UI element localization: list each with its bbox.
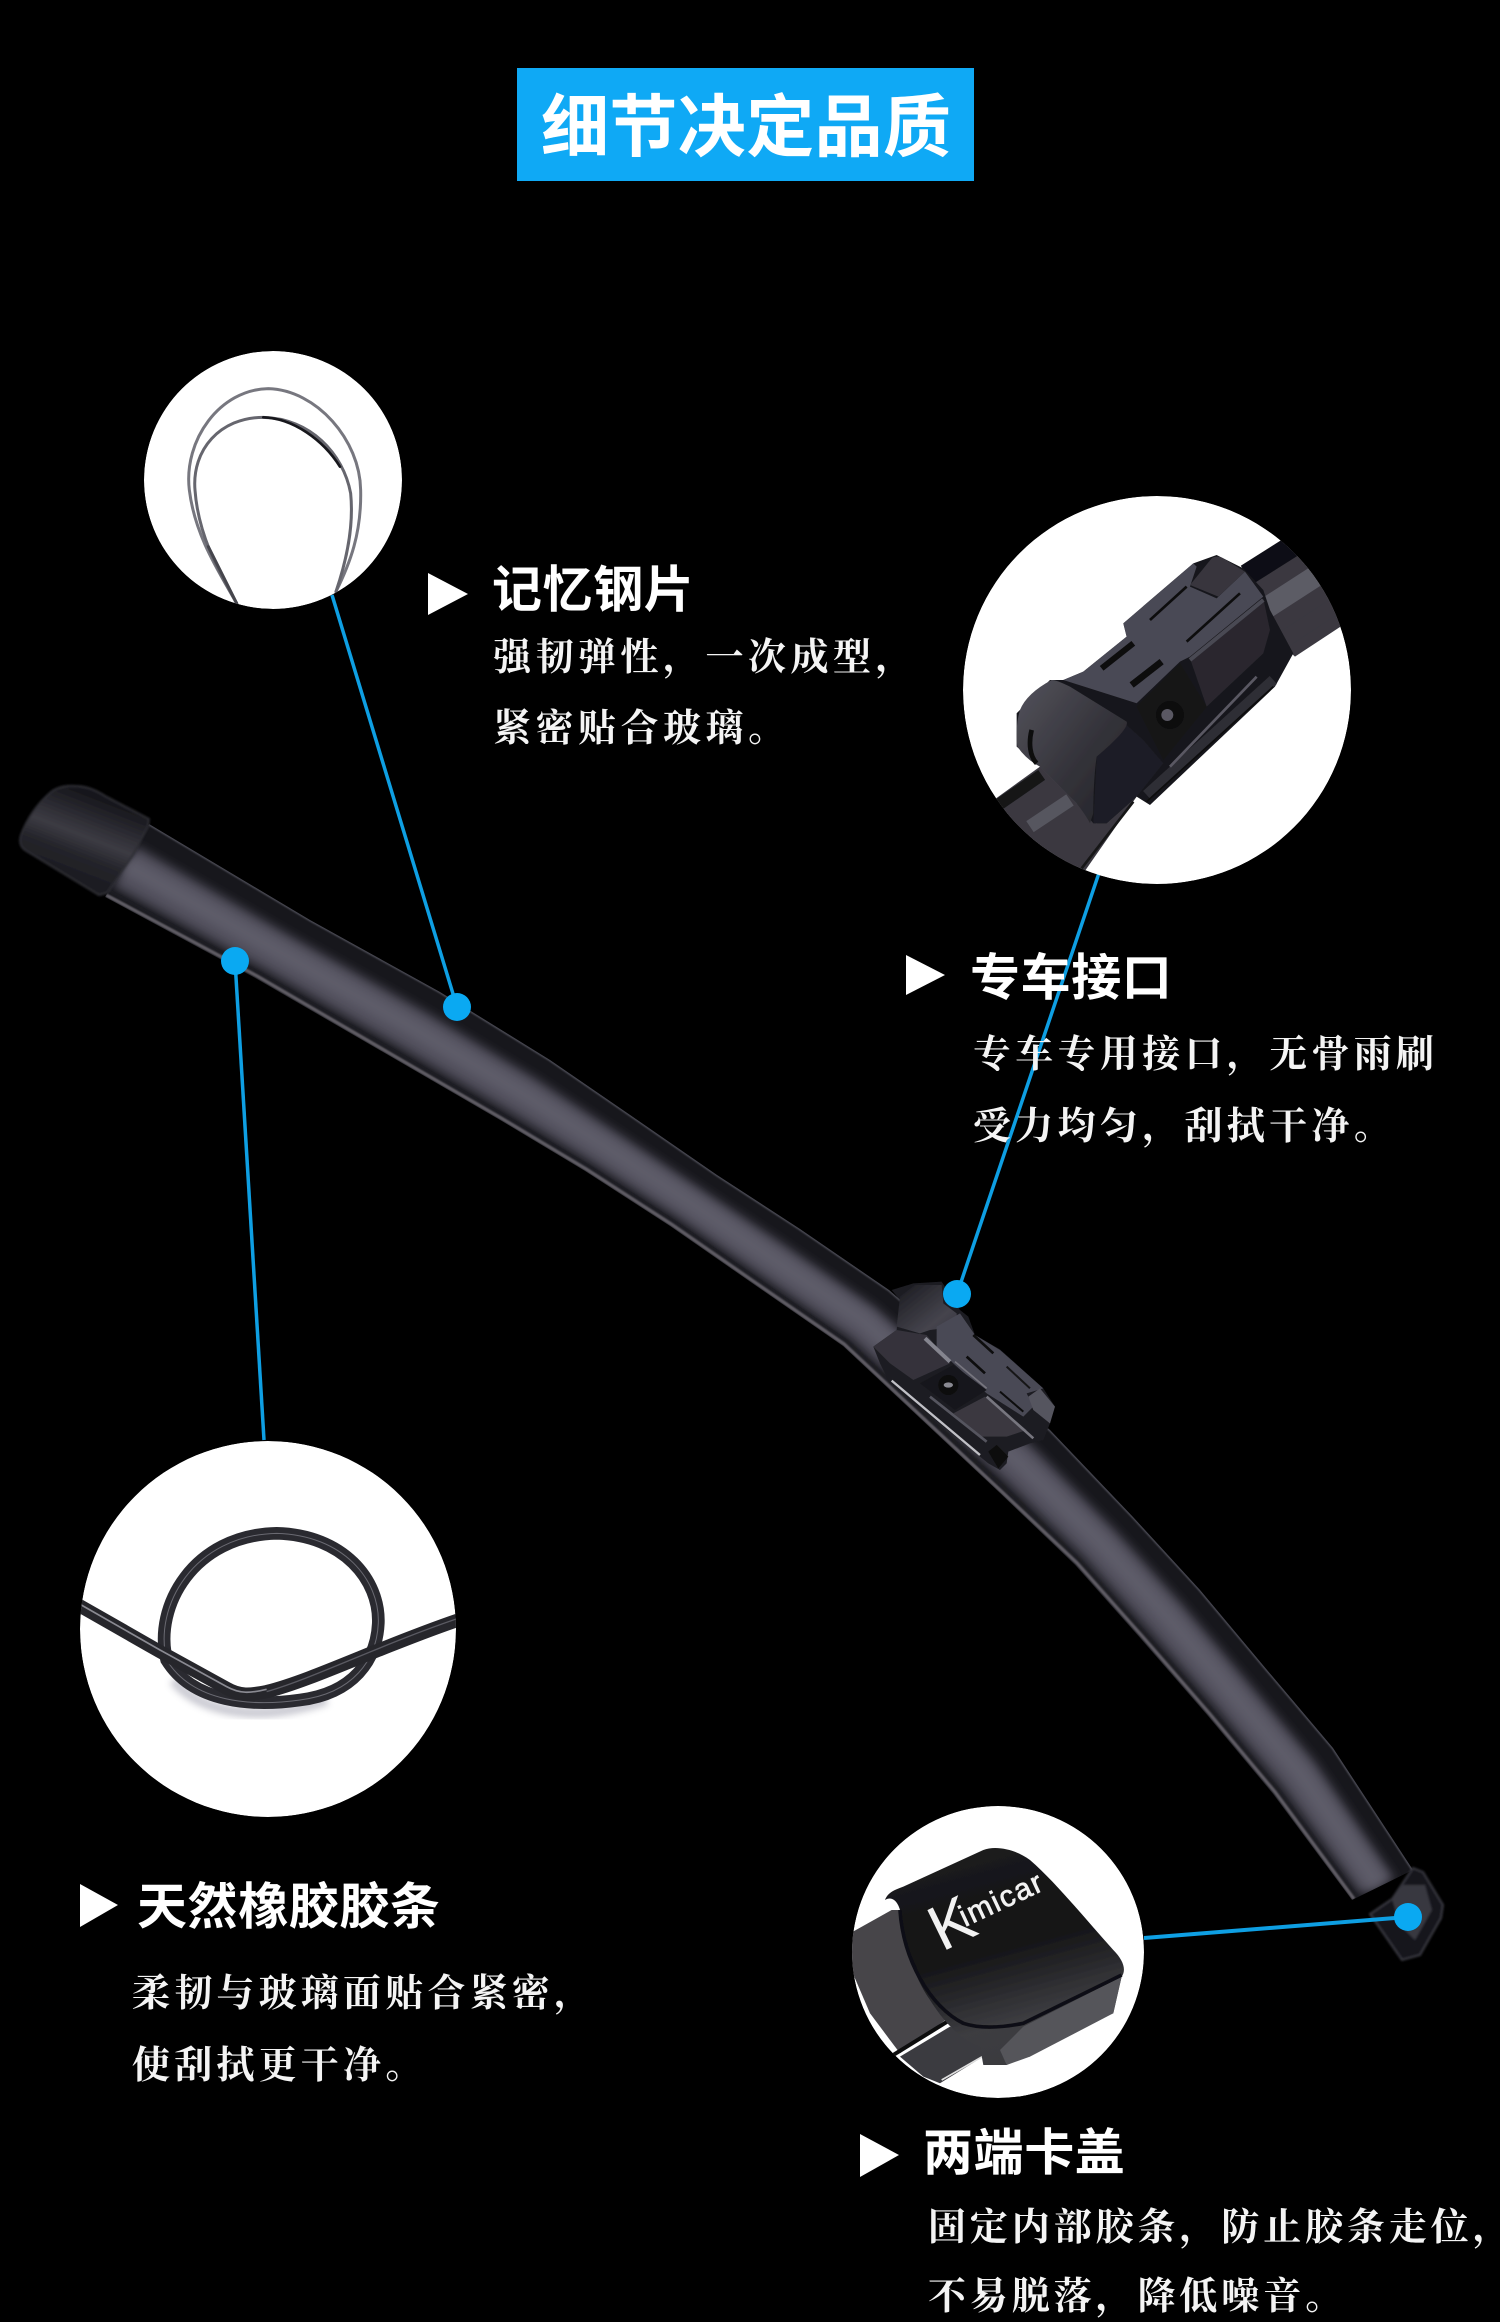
heading: 两端卡盖 [923,2125,1125,2181]
heading: 记忆钢片 [492,562,694,618]
circle: memory steel strips [144,351,402,609]
wiper blade [20,786,1443,1960]
icon: triangle [906,955,945,995]
right end cap [1370,1868,1443,1960]
icon: triangle [428,573,468,615]
clip tab [1190,557,1245,597]
dot: end cap [1394,1903,1422,1931]
left end cap [20,786,149,895]
title: 细节决定品质 [541,90,951,166]
feature: memory steel [428,562,918,750]
heading: 专车接口 [970,950,1172,1006]
dot: memory steel [443,993,471,1021]
blade body [105,824,1413,1900]
description [493,637,918,750]
heading: 天然橡胶胶条 [137,1879,441,1935]
logo: Kimicar: imicar [954,1866,1049,1933]
feature: natural rubber strip [80,1879,596,2087]
description: 柔韧与玻璃面贴合紧密， [132,1973,596,2016]
leader line: memory steel [332,595,457,1007]
lower blade [900,2026,982,2084]
center recess and bolt [1156,701,1184,729]
leader line: connector [957,870,1100,1294]
logo: Kimicar [927,1875,1040,1950]
leader line: rubber strip [235,961,264,1440]
description [132,1973,596,2087]
description [928,2207,1500,2319]
center connector [873,1282,1055,1470]
side blade [850,1910,950,2053]
description: 紧密贴合玻璃。 [493,708,791,750]
description: 专车专用接口，无骨雨刷 [973,1034,1438,1077]
icon: triangle [860,2134,899,2177]
upper blade [1247,524,1363,657]
description: 固定内部胶条，防止胶条走位， [928,2207,1500,2250]
logo: Kimicar: K [917,1881,987,1965]
description: 使刮拭更干净。 [132,2045,427,2087]
slots [1102,643,1133,668]
body [1017,555,1293,823]
top plate [1063,563,1263,703]
leader line: end cap [1144,1917,1408,1938]
rail [1147,680,1273,795]
cap body [885,1848,1124,2065]
circle: connector close-up [963,496,1363,884]
description: 受力均匀，刮拭干净。 [973,1106,1396,1149]
title [517,68,974,181]
description: 不易脱落，降低噪音。 [928,2276,1347,2319]
side block [1190,598,1270,707]
description: 强韧弹性，一次成型， [493,637,918,680]
feature: end caps [860,2125,1500,2319]
circle: rubber strip [78,1441,458,1817]
icon: triangle [80,1884,118,1927]
circle: end cap close-up [850,1806,1144,2098]
lower blade [996,766,1136,870]
front cap [1093,725,1163,823]
description [973,1034,1438,1149]
feature: dedicated connector [906,950,1438,1149]
dot: connector [943,1280,971,1308]
dot: rubber strip [221,947,249,975]
